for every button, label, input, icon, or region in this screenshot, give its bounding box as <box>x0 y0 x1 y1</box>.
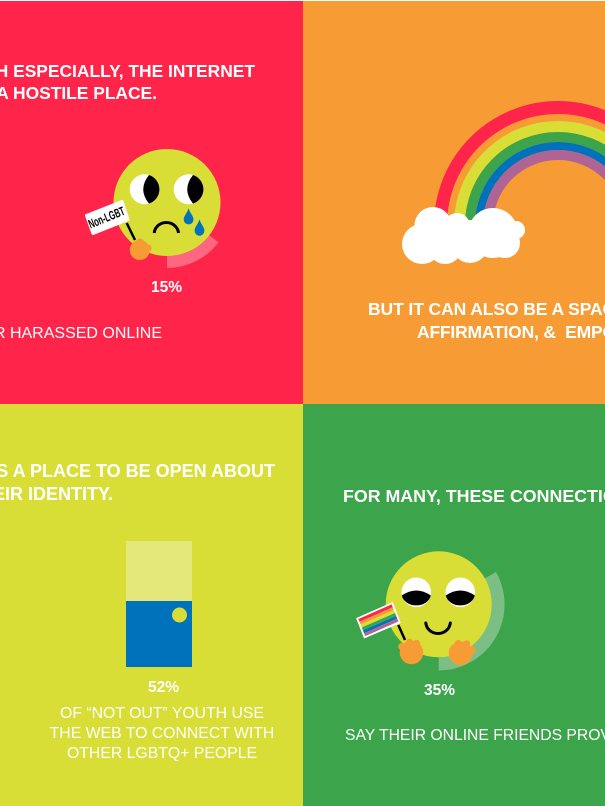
text: not out youth <box>50 705 274 762</box>
panel: yellow, open about identity <box>0 403 303 806</box>
stat: 15%: 15% <box>151 279 182 296</box>
text: not out youth: OTHER LGBTQ+ PEOPLE <box>67 745 257 762</box>
panel: orange, rainbow <box>303 1 605 404</box>
panel: red, hostile place <box>0 1 303 404</box>
panel: green, connections <box>303 403 605 806</box>
stat: 52%: 52% <box>148 679 179 696</box>
text: not out youth: OF “NOT OUT” YOUTH USE <box>60 705 264 722</box>
icon: sad face with sign: Non-LGBT <box>86 204 127 231</box>
icon: happy face with rainbow flag <box>356 551 504 670</box>
text: not out youth: THE WEB TO CONNECT WITH <box>50 725 274 742</box>
chart: 52% bar <box>126 541 192 667</box>
icon: sad face with sign <box>85 149 220 268</box>
icon: rainbow with cloud <box>402 101 605 264</box>
stat: 35%: 35% <box>424 682 455 699</box>
